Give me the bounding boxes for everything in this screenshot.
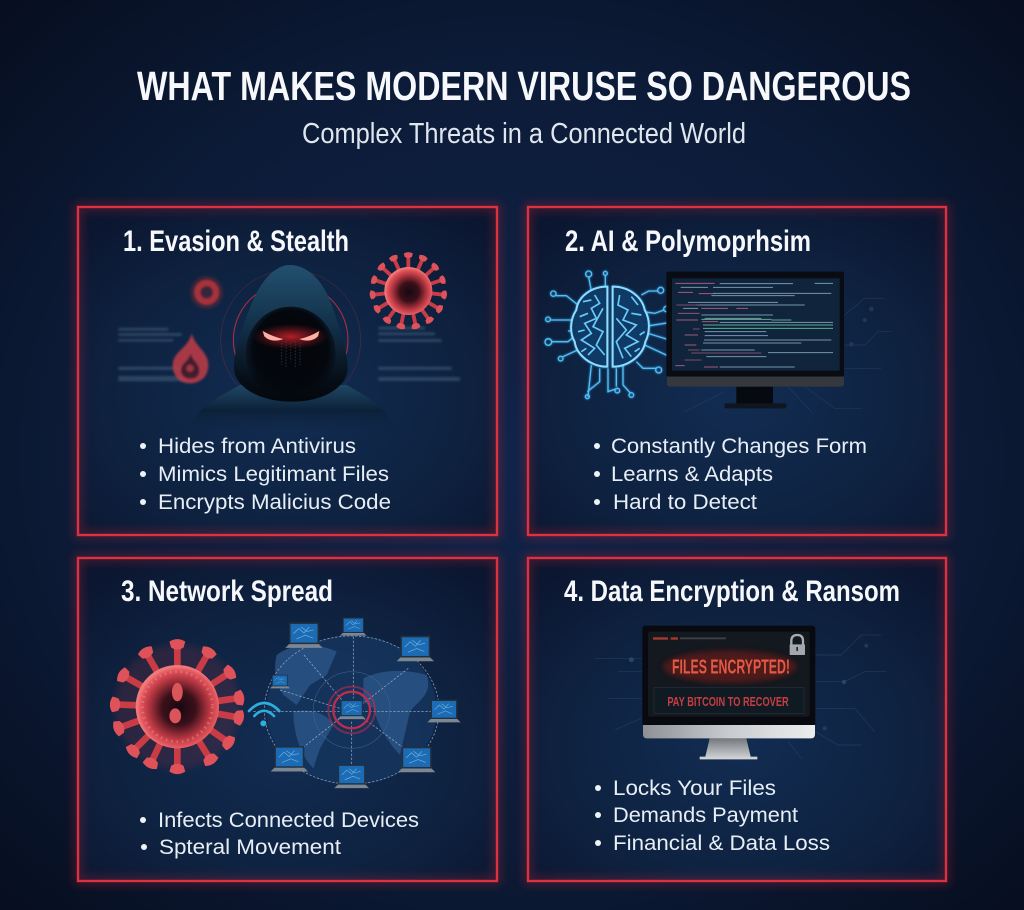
brain and monitor illustration [545, 271, 891, 412]
flame icon [173, 333, 208, 383]
panel frame 1 [78, 207, 497, 535]
bullet list 2: Constantly Changes Form [611, 435, 867, 458]
central alert rings [328, 687, 375, 733]
monitor [666, 272, 844, 408]
panel: network spread [78, 558, 497, 881]
panel frame 4 [528, 558, 946, 881]
mask texture [282, 342, 300, 368]
bullet list 2: Hard to Detect [613, 491, 757, 514]
panel frame 3 [78, 558, 497, 881]
brain folds [578, 295, 645, 358]
monitor body [642, 626, 815, 726]
shoulders [188, 385, 397, 432]
panel: AI and polymorphism [528, 207, 946, 535]
panel: data encryption and ransom [528, 558, 946, 881]
globe [253, 635, 439, 785]
faint circuit lines [685, 298, 891, 412]
bullet list 2: Learns & Adapts [611, 463, 773, 486]
bullet list 3: Spteral Movement [159, 836, 341, 859]
glowing eyes [252, 324, 329, 349]
subtitle: Complex Threats in a Connected World [302, 118, 746, 150]
code lines [675, 283, 833, 367]
panel: evasion and stealth [78, 207, 497, 535]
pay bitcoin box [654, 687, 804, 713]
large red virus [110, 639, 245, 774]
files encrypted text: FILES ENCRYPTED! [672, 656, 790, 678]
pay bitcoin box: PAY BITCOIN TO RECOVER [667, 694, 789, 709]
padlock [790, 635, 805, 655]
bullet list 1: Encrypts Malicius Code [158, 491, 391, 514]
heading 4: 4. Data Encryption & Ransom [564, 575, 900, 608]
bullet list 3: Infects Connected Devices [158, 809, 419, 832]
wifi icon [249, 703, 279, 726]
heading 3: 3. Network Spread [121, 575, 333, 608]
red rings [221, 270, 361, 410]
bullet list 4: Locks Your Files [613, 777, 776, 800]
brain traces [545, 271, 678, 399]
small virus [190, 276, 223, 309]
heading 1: 1. Evasion & Stealth [123, 225, 349, 258]
brain hemispheres [571, 287, 649, 367]
faint circuit lines [595, 635, 886, 758]
red virus [369, 252, 447, 330]
bullet list 4: Financial & Data Loss [613, 832, 830, 855]
hooded figure illustration [118, 252, 460, 432]
laptops [270, 618, 461, 788]
virus and network illustration [110, 618, 461, 788]
screen glow [663, 651, 796, 683]
hood [234, 265, 348, 402]
brain [545, 271, 678, 399]
panel frame 2 [528, 207, 946, 535]
ransomware monitor illustration [595, 626, 886, 759]
bullet list 1 [140, 435, 391, 514]
bullet list 3 [140, 809, 419, 859]
bullet list 1: Mimics Legitimant Files [158, 463, 389, 486]
bullet list 1: Hides from Antivirus [158, 435, 356, 458]
face shadow [246, 307, 336, 400]
bullet list 4 [595, 777, 830, 855]
bullet list 4: Demands Payment [613, 804, 798, 827]
bullet list 2 [594, 435, 867, 514]
network dashed lines [253, 636, 439, 784]
blurred text fragments [118, 327, 460, 381]
monitor stand [700, 738, 757, 759]
status line [653, 637, 726, 640]
heading 2: 2. AI & Polymoprhsim [565, 225, 811, 258]
continents [275, 645, 428, 768]
